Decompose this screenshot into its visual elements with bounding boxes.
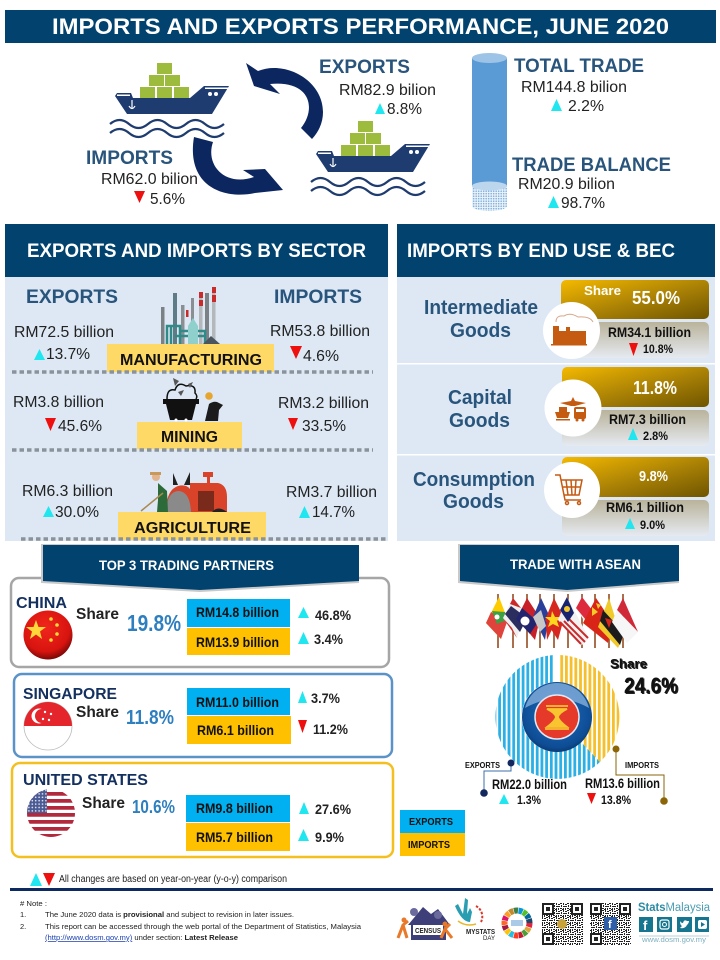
row: capital goods: 11.8% <box>633 378 677 398</box>
callout: asean imports: 13.8% <box>601 793 631 807</box>
banner: top 3 trading partners <box>41 544 359 592</box>
logo: mystats day <box>455 898 495 942</box>
row: intermediate goods <box>424 280 709 359</box>
exports summary <box>319 57 436 118</box>
column heading: exports: EXPORTS <box>26 287 118 308</box>
panel: united states: RM9.8 billion <box>196 800 273 816</box>
icon: tractor and farmer <box>141 472 227 512</box>
row: capital goods <box>448 367 709 446</box>
row: mining: 45.6% <box>58 418 102 435</box>
exports summary: 8.8% <box>387 101 422 118</box>
panel: united states: RM5.7 billion <box>196 829 273 845</box>
qr code: facebook: f <box>608 919 612 931</box>
footnotes <box>20 899 362 942</box>
title: IMPORTS AND EXPORTS PERFORMANCE, JUNE 2020 <box>52 14 669 39</box>
icon: asean flags <box>486 594 638 648</box>
row: consumption goods: 9.8% <box>639 468 668 485</box>
banner: trade with asean: TRADE WITH ASEAN <box>510 556 641 572</box>
row: capital goods: Goods <box>449 409 510 432</box>
row: mining: RM3.2 billion <box>278 395 369 412</box>
legend: exports and imports: IMPORTS <box>408 840 450 851</box>
icon: mining cart and miner <box>163 378 223 422</box>
panel: china <box>11 578 389 667</box>
column heading: imports: IMPORTS <box>274 287 362 308</box>
exports summary: RM82.9 bilion <box>339 82 436 99</box>
row: capital goods: RM7.3 billion <box>609 412 686 427</box>
exports summary: EXPORTS <box>319 57 410 78</box>
row: agriculture: RM3.7 billion <box>286 484 377 501</box>
panel: china: 19.8% <box>127 610 181 636</box>
legend: exports and imports: EXPORTS <box>409 817 453 828</box>
panel: china: 46.8% <box>315 608 351 623</box>
row: intermediate goods: 10.8% <box>643 344 673 356</box>
imports summary: RM62.0 bilion <box>101 171 198 188</box>
icon: plane, ship and truck <box>555 397 586 422</box>
footnotes: (http://www.dosm.gov.my) under section: Latest Release <box>45 933 238 942</box>
row: mining: RM3.8 billion <box>13 394 104 411</box>
row: manufacturing: RM53.8 billion <box>270 323 370 340</box>
icon: trade cylinder <box>472 53 507 211</box>
row: consumption goods: Consumption <box>413 468 535 491</box>
total trade summary: RM144.8 bilion <box>521 79 627 96</box>
row: agriculture <box>22 483 377 540</box>
callout: asean exports: EXPORTS <box>465 761 501 770</box>
icon: factory <box>161 287 220 345</box>
logo: stats malaysia social: www.dosm.gov.my <box>641 935 706 944</box>
logo: stats malaysia social: StatsMalaysia <box>638 902 711 914</box>
panel: united states: 10.6% <box>132 797 175 817</box>
imports summary: IMPORTS <box>86 148 173 169</box>
panel: united states: 27.6% <box>315 802 351 817</box>
row: manufacturing: MANUFACTURING <box>120 352 262 369</box>
qr code: dosm website <box>542 903 583 945</box>
row: mining: MINING <box>161 429 218 446</box>
row: consumption goods: RM6.1 billion <box>606 500 684 515</box>
title <box>5 10 716 43</box>
panel: singapore: 3.7% <box>311 691 340 706</box>
row: intermediate goods: Goods <box>450 319 511 342</box>
footnotes: 1. <box>20 910 26 919</box>
panel: imports by end use and BEC <box>397 224 715 541</box>
qr code: facebook <box>590 903 631 945</box>
panel: singapore: 11.2% <box>313 722 348 737</box>
panel: united states: 9.9% <box>315 830 344 845</box>
panel: united states: Share <box>82 795 125 812</box>
row: capital goods: 2.8% <box>643 431 668 443</box>
panel: china: RM13.9 billion <box>196 634 279 650</box>
logo: mystats day: DAY <box>483 936 495 942</box>
row: intermediate goods: Intermediate <box>424 296 538 319</box>
banner: top 3 trading partners: TOP 3 TRADING PARTNERS <box>99 557 274 573</box>
arrow: imports cycle <box>193 137 283 195</box>
legend: exports and imports <box>400 810 465 856</box>
label: share: Share <box>610 656 647 671</box>
logo: mystats day: MYSTATS <box>466 929 495 936</box>
label: share: 24.6% <box>625 674 679 699</box>
total trade summary <box>514 56 644 115</box>
row: mining <box>13 394 369 449</box>
legend: change indicator note <box>30 873 287 886</box>
logo: stats malaysia social <box>638 902 711 944</box>
icon: export ship <box>311 121 430 195</box>
label: share: 24.6% <box>624 673 678 698</box>
row: consumption goods <box>413 457 709 536</box>
chart: asean trade donut <box>465 655 679 807</box>
icon: singapore flag <box>24 702 72 750</box>
icon: china flag <box>24 610 72 660</box>
row: manufacturing: RM72.5 billion <box>14 324 114 341</box>
callout: asean exports <box>465 760 567 807</box>
callout: asean exports: 1.3% <box>517 793 541 807</box>
panel: united states: UNITED STATES <box>23 772 148 789</box>
row: manufacturing: 13.7% <box>46 346 90 363</box>
callout: asean exports: RM22.0 billion <box>492 777 567 792</box>
footnotes: # Note : <box>20 899 47 908</box>
panel: singapore: 11.8% <box>126 707 174 729</box>
footnotes: This report can be accessed through the web portal of the Department of Statistics, Malaysia <box>45 922 362 931</box>
logo: census: CENSUS <box>415 928 441 935</box>
panel: singapore: RM6.1 billion <box>197 722 274 738</box>
footnotes: 2. <box>20 922 26 931</box>
row: manufacturing: 4.6% <box>303 348 339 365</box>
row: agriculture: AGRICULTURE <box>134 520 251 537</box>
panel: exports and imports by sector <box>5 224 388 541</box>
row: intermediate goods: Share <box>584 283 621 298</box>
heading: end use: IMPORTS BY END USE & BEC <box>407 241 675 262</box>
imports summary: 5.6% <box>150 191 185 208</box>
legend: change indicator note: All changes are based on year-on-year (y-o-y) comparison <box>59 874 287 885</box>
callout: asean imports: IMPORTS <box>625 761 660 770</box>
row: manufacturing <box>14 323 370 372</box>
icon: factory <box>551 314 593 346</box>
row: intermediate goods: 55.0% <box>632 288 680 308</box>
panel: china: RM14.8 billion <box>196 604 279 620</box>
panel: singapore: Share <box>76 704 119 721</box>
label: share: Share <box>611 657 648 672</box>
trade balance summary: RM20.9 bilion <box>518 176 615 193</box>
panel: china: 3.4% <box>314 632 343 647</box>
panel: singapore: RM11.0 billion <box>196 694 279 710</box>
row: consumption goods: 9.0% <box>640 520 665 532</box>
logo: census <box>398 907 452 940</box>
imports summary <box>86 148 198 208</box>
total trade summary: TOTAL TRADE <box>514 56 644 77</box>
callout: asean imports <box>585 746 668 807</box>
panel: singapore: SINGAPORE <box>23 686 117 703</box>
panel: united states <box>12 763 393 857</box>
row: agriculture: RM6.3 billion <box>22 483 113 500</box>
row: mining: 33.5% <box>302 418 346 435</box>
panel: china: Share <box>76 606 119 623</box>
trade balance summary: 98.7% <box>561 195 605 212</box>
row: consumption goods: Goods <box>443 490 504 513</box>
row: capital goods: Capital <box>448 386 512 409</box>
panel: singapore <box>14 674 392 757</box>
row: agriculture: 14.7% <box>312 504 355 521</box>
icon: asean emblem <box>522 682 592 752</box>
icon: us flag <box>27 789 75 838</box>
heading: sector: EXPORTS AND IMPORTS BY SECTOR <box>27 241 366 262</box>
row: intermediate goods: RM34.1 billion <box>608 325 691 340</box>
logo: stats malaysia social: f <box>643 918 648 933</box>
logo: sdg wheel <box>504 910 530 936</box>
arrow: exports cycle <box>246 63 323 139</box>
panel: china: CHINA <box>16 595 67 612</box>
footnotes: The June 2020 data is provisional and subject to revision in later issues. <box>45 910 294 919</box>
banner: trade with asean <box>458 544 679 592</box>
icon: shopping cart <box>555 475 582 504</box>
row: agriculture: 30.0% <box>55 504 99 521</box>
callout: asean imports: RM13.6 billion <box>585 776 660 791</box>
icon: import ship <box>110 63 229 137</box>
total trade summary: 2.2% <box>568 98 604 115</box>
trade balance summary <box>512 155 671 212</box>
label: share <box>610 656 679 699</box>
trade balance summary: TRADE BALANCE <box>512 155 671 176</box>
